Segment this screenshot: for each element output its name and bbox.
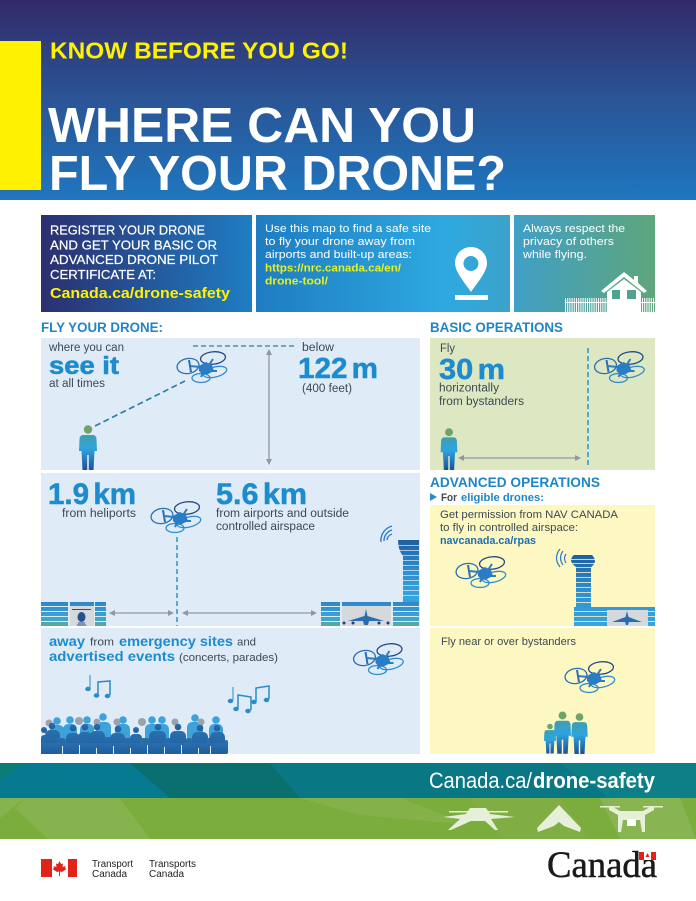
text: below 122 m: 122 m (298, 353, 378, 385)
text: near or over bystanders: Fly near or over bystanders (441, 636, 577, 648)
map tool link: drone-tool/ (265, 276, 328, 288)
text: permission (440, 509, 619, 547)
boundary dashed line (176, 537, 178, 626)
map tool link (265, 262, 401, 288)
logo: Transport Canada (41, 859, 196, 880)
heading: fly your drone: FLY YOUR DRONE: (41, 320, 163, 335)
icon: family (544, 712, 588, 754)
icon: fixed wing silhouette (537, 805, 581, 832)
logo: Canada wordmark: Canada (547, 845, 657, 886)
text: 30 m (439, 343, 524, 408)
text: 5.6 km: controlled airspace (216, 521, 315, 533)
header band (0, 0, 696, 201)
wordmark text: Canada (92, 869, 127, 880)
icon: drone (150, 501, 202, 532)
panel: privacy: Always respect the (523, 223, 625, 235)
panel: register your drone: CERTIFICATE AT: (50, 268, 156, 282)
wordmark text (92, 859, 196, 880)
icon: music notes left (85, 675, 110, 698)
boundary dashed line (587, 348, 589, 467)
icon: drone (593, 351, 645, 382)
text: away from: advertised events (49, 648, 175, 664)
panel: basic operations (430, 338, 655, 470)
arrow: height (266, 349, 272, 465)
panel: near bystanders (430, 628, 655, 754)
text: 30 m: horizontally (439, 382, 499, 394)
map tool link: https://nrc.canada.ca/en/ (265, 262, 401, 274)
heading: basic operations: BASIC OPERATIONS (430, 320, 563, 335)
panel: register your drone: REGISTER YOUR DRONE (50, 224, 205, 238)
text: permission: Get permission from NAV CANADA (440, 509, 619, 521)
text: away from: emergency sites (119, 633, 233, 649)
text: away from: and (237, 636, 256, 648)
height dashed line (193, 345, 295, 347)
icon: camera drone silhouette (600, 806, 663, 832)
url (429, 768, 656, 793)
panel: controlled airspace (430, 505, 655, 626)
panel: privacy (514, 215, 655, 312)
footer band (0, 763, 696, 839)
icon: quadcopter silhouette (443, 808, 515, 830)
text: 30 m: Fly (440, 343, 455, 355)
text: below 122 m: below (302, 342, 335, 354)
icon: drone (176, 351, 228, 382)
main title: WHERE CAN YOU (48, 99, 476, 153)
eyebrow heading: KNOW BEFORE YOU GO! (50, 38, 348, 64)
text: 5.6 km (216, 478, 349, 533)
panel: heliports and airports (41, 473, 420, 626)
arrow: bystander distance (458, 455, 581, 461)
text: away from: from (90, 636, 114, 648)
wordmark text: Transports (149, 859, 196, 870)
panel: register your drone (41, 215, 252, 312)
text: away from (49, 633, 278, 664)
sight dashed line (95, 381, 185, 426)
text: see it (48, 342, 124, 390)
panel: register your drone: ADVANCED DRONE PILOT (50, 253, 218, 267)
illustration: crowd (41, 713, 228, 754)
text: 5.6 km: 5.6 km (216, 478, 307, 511)
icon: airport and tower (321, 526, 419, 626)
icon: heliport (41, 602, 106, 626)
icon: house and fence (565, 272, 655, 312)
text: away from: away (49, 633, 85, 649)
heading: advanced operations: For (441, 492, 458, 504)
wordmark text: Canada (149, 869, 184, 880)
text: 30 m: from bystanders (439, 396, 524, 408)
url: Canada.ca/ (429, 768, 533, 793)
text: below 122 m (298, 342, 378, 395)
panel: line of sight and height (41, 338, 420, 470)
panel: privacy: privacy of others (523, 236, 615, 248)
heading: advanced operations (430, 475, 600, 504)
icon: music notes right (228, 686, 269, 713)
panel: map tool: Use this map to find a safe site (265, 223, 431, 235)
text: away from: (concerts, parades) (179, 652, 278, 664)
text: 30 m: 30 m (439, 354, 505, 386)
main title: FLY YOUR DRONE? (49, 147, 506, 201)
main title (48, 99, 506, 201)
url: drone-safety (533, 768, 656, 793)
heading: advanced operations: ADVANCED OPERATIONS (430, 475, 600, 490)
panel: register your drone: AND GET YOUR BASIC OR (50, 238, 217, 252)
panel: map tool: to fly your drone away from (265, 236, 415, 248)
text: 5.6 km: from airports and outside (216, 508, 349, 520)
text: see it: at all times (49, 378, 105, 390)
arrow: airport distance (182, 610, 317, 616)
text: see it: where you can (48, 342, 124, 354)
panel: privacy: while flying. (522, 249, 587, 261)
panel: map tool: airports and built-up areas: (265, 249, 412, 261)
icon: drone (564, 661, 616, 692)
heading: advanced operations: eligible drones: (461, 492, 544, 504)
registration link: Canada.ca/drone-safety (50, 285, 231, 302)
icon: tower and airport (556, 549, 655, 626)
text: permission: navcanada.ca/rpas (440, 535, 536, 547)
icon: map pin (455, 247, 488, 300)
arrow: heliport distance (109, 610, 174, 616)
panel: map tool (256, 215, 510, 312)
icon: drone (455, 556, 507, 588)
icon: drone (352, 643, 404, 674)
icon: person (79, 425, 97, 470)
panel: emergency sites and events (41, 628, 420, 754)
wordmark text: Transport (92, 859, 133, 870)
yellow accent block (0, 41, 41, 190)
text: permission: to fly in controlled airspace: (440, 522, 578, 534)
icon: person (441, 428, 457, 470)
text: 1.9 km: from heliports (62, 508, 136, 520)
text: below 122 m: (400 feet) (302, 383, 352, 395)
text: 1.9 km: 1.9 km (48, 478, 136, 511)
text: see it: see it (49, 352, 120, 380)
